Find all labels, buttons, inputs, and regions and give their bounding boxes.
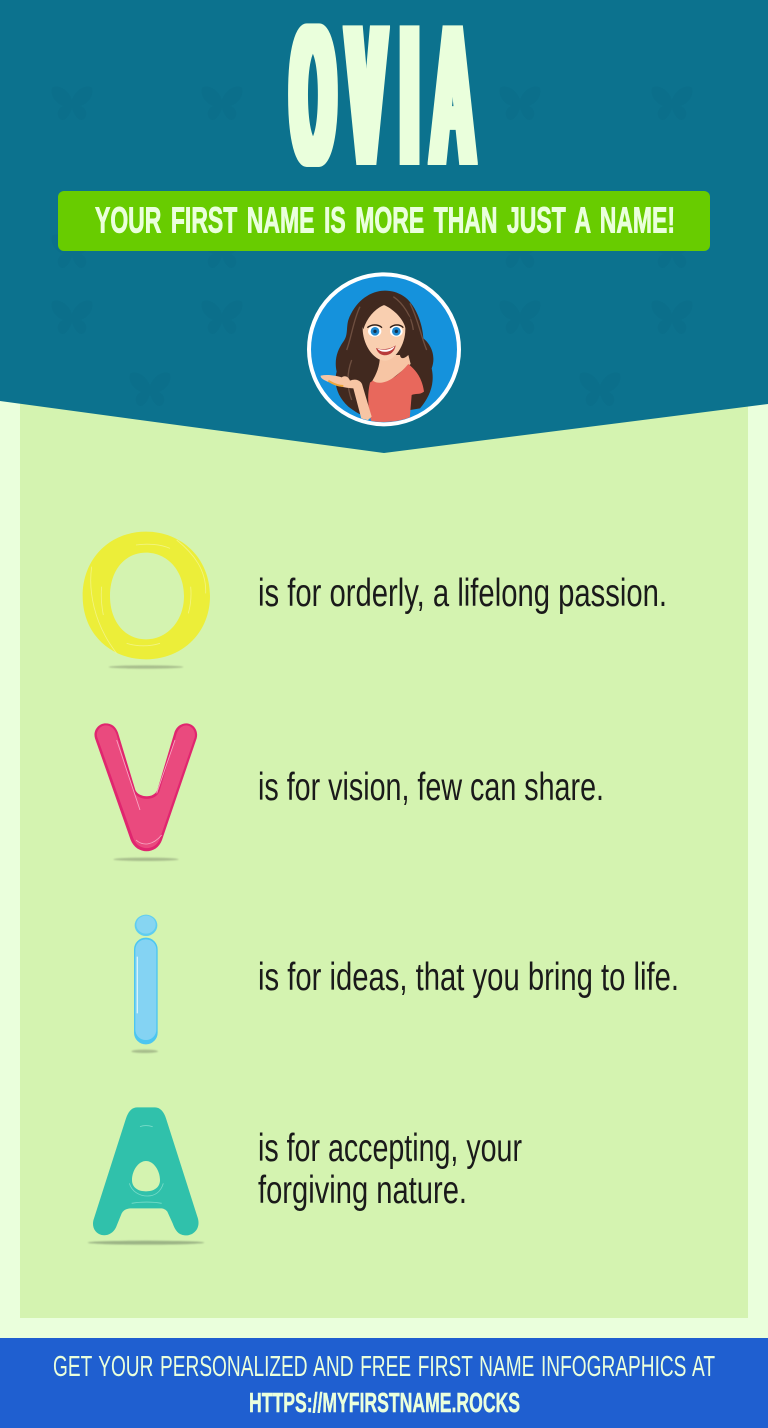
text: A lines: forgiving nature. [258, 1169, 467, 1212]
title [292, 0, 474, 208]
panel: letters background [20, 390, 748, 1318]
text: A lines [258, 1127, 522, 1212]
icon: letter I [131, 915, 158, 1053]
footer url: HTTPS://MYFIRSTNAME.ROCKS [249, 1387, 520, 1418]
icon: avatar of smiling woman [309, 274, 459, 424]
text: A lines: is for accepting, your [258, 1127, 522, 1170]
panel: teal header [0, 0, 768, 453]
footer band [0, 1338, 768, 1428]
icon: letter V [94, 723, 197, 861]
icon: letter O [83, 532, 210, 669]
text: V line: is for vision, few can share. [258, 766, 604, 809]
tagline banner [58, 191, 710, 251]
icon: letter A [88, 1107, 204, 1245]
